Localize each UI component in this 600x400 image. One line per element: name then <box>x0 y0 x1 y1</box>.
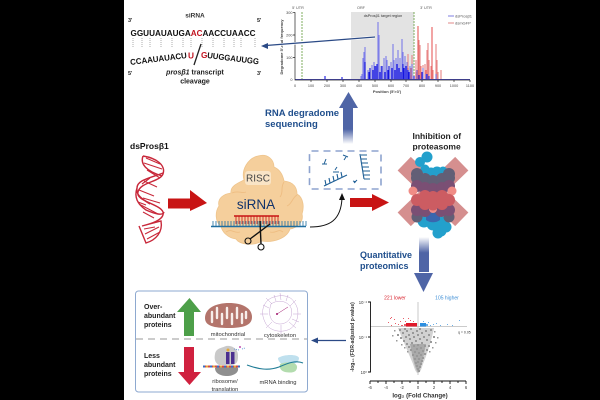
cleaved transcript left: CCAAUAUACU <box>130 50 187 67</box>
icon: mitochondrion <box>205 303 252 328</box>
label: RNA degradome sequencing <box>265 108 339 130</box>
region labels: dsProsβ1 target region <box>364 14 402 18</box>
axis labels: 100 <box>308 84 314 88</box>
siRNA sequence: GGUUAUAUGAACAACCUAACC <box>130 28 256 38</box>
counts: 221 lower <box>384 296 406 302</box>
protein blob <box>216 155 303 244</box>
region labels: ORF <box>357 6 366 10</box>
non significant density <box>398 328 434 373</box>
strand end labels <box>128 18 262 77</box>
tick labels: -6 <box>368 385 373 390</box>
icon: scissors <box>245 221 270 250</box>
base pairing dots <box>133 38 255 48</box>
strand end labels: 3' <box>128 18 133 24</box>
significant higher points <box>420 320 460 326</box>
UTR boundaries <box>302 12 414 80</box>
threshold label: q = 0.05 <box>458 330 471 334</box>
icon: cytoskeleton <box>260 293 301 334</box>
target region shading <box>351 12 414 80</box>
heading: Inhibition of proteasome: proteasome <box>412 142 461 152</box>
arrow: chart to siRNA <box>261 37 375 49</box>
label: RNA degradome sequencing: sequencing <box>265 119 318 130</box>
less abundant label: proteins <box>144 371 172 378</box>
label: Quantitative proteomics: Quantitative <box>360 250 412 260</box>
dashed box: RNA fragments <box>310 151 381 189</box>
mRNA binding label: mRNA binding <box>259 380 297 386</box>
siRNA cleavage diagram: cleavage <box>180 78 210 86</box>
significant lower points <box>388 317 417 326</box>
label: Quantitative proteomics: proteomics <box>360 261 409 271</box>
over-abundant label <box>144 304 176 329</box>
mitochondrial label: mitochondrial <box>211 332 245 338</box>
tick labels: 10⁻¹ <box>359 335 368 340</box>
white panel <box>124 0 476 400</box>
legend <box>448 14 473 26</box>
over-abundant label: Over- <box>144 304 163 311</box>
axis labels: 500 <box>372 84 378 88</box>
red arrow: dsRNA to RISC <box>168 190 207 211</box>
RISC texture <box>226 182 297 232</box>
tick labels: 0 <box>417 385 420 390</box>
region labels: 3' UTR <box>420 6 432 10</box>
axis labels: 1000 <box>450 84 458 88</box>
icon: DNA helix <box>136 156 164 243</box>
icon: mRNA binding <box>247 355 303 373</box>
transcript cleavage caption: prosβ1 transcript <box>165 70 224 76</box>
volcano plot: 105 higher <box>435 296 459 302</box>
cytoskeleton label: cytoskeleton <box>264 333 296 339</box>
tick labels: 4 <box>449 385 452 390</box>
icon: ribosome <box>203 346 245 376</box>
siRNA heading: siRNA <box>185 12 205 20</box>
tick labels: 2 <box>433 385 436 390</box>
less abundant label: Less <box>144 353 160 360</box>
label: RNA degradome sequencing: RNA degradome <box>265 108 339 119</box>
axis labels: 900 <box>435 84 441 88</box>
siRNA cleavage diagram <box>128 12 262 86</box>
red down arrow <box>178 347 201 385</box>
RNA fragments <box>322 154 370 186</box>
strand end labels: 5' <box>128 71 133 77</box>
strand end labels: 3' <box>257 71 262 77</box>
axis labels: 700 <box>403 84 409 88</box>
legend: dsmGFP <box>455 20 471 26</box>
degradome frequency chart: Position (5'>3') <box>373 89 402 94</box>
ribosome translation label: translation <box>212 387 238 393</box>
axes <box>368 302 466 384</box>
axis labels: 0 <box>294 84 296 88</box>
axis labels: 300 <box>340 84 346 88</box>
cleaved base G: G <box>201 50 207 60</box>
proteasome with inhibition cross <box>398 152 468 238</box>
proteasome subunits <box>415 152 452 238</box>
ribosome translation label <box>212 379 238 393</box>
legend: dsProsβ1 <box>455 14 473 18</box>
degradome frequency chart <box>279 6 474 94</box>
axis labels: 100 <box>286 56 292 60</box>
volcano plot: -log₁₀ (FDR-adjusted p-value) <box>350 302 356 372</box>
degradome frequency chart: Degradome 5'-end frequency <box>279 19 284 74</box>
tick labels: 6 <box>465 385 468 390</box>
RISC label <box>245 171 271 185</box>
axis labels: 0 <box>290 78 292 82</box>
tick labels: 10⁻² <box>359 300 368 305</box>
cleaved base U: U <box>188 50 194 60</box>
volcano plot <box>350 296 471 400</box>
region labels: 5' UTR <box>292 6 304 10</box>
over-abundant label: proteins <box>144 322 172 329</box>
axis labels: 400 <box>356 84 362 88</box>
blue peaks <box>361 22 436 80</box>
axis labels: 200 <box>324 84 330 88</box>
heading: Inhibition of proteasome <box>412 131 461 152</box>
axis titles: log₂ (Fold Change) <box>392 392 448 400</box>
red arrow: to proteasome <box>350 194 389 211</box>
cleaved transcript right: UUGGAUUGG <box>207 50 260 66</box>
green up arrow <box>177 298 201 336</box>
inhibition cross <box>398 157 468 226</box>
less abundant label: abundant <box>144 362 176 369</box>
arrow: quantitative proteomics <box>414 237 433 292</box>
label: dsProsβ1: dsProsβ1 <box>130 141 169 151</box>
axis labels <box>286 11 474 88</box>
target mRNA <box>211 226 306 228</box>
strand end labels: 5' <box>257 18 262 24</box>
heading: Inhibition of proteasome: Inhibition of <box>412 131 461 141</box>
red peaks <box>408 26 441 80</box>
axis labels: 1100 <box>466 84 474 88</box>
label: Quantitative proteomics <box>360 250 412 271</box>
siRNA label: siRNA <box>237 197 275 212</box>
axis labels: 600 <box>388 84 394 88</box>
arrow: RNA degradome sequencing <box>339 92 358 144</box>
axis labels: 200 <box>286 34 292 38</box>
arrow: volcano to summary <box>311 338 346 344</box>
axis labels: 300 <box>286 11 292 15</box>
axes <box>293 12 470 82</box>
ribosome translation label: ribosome/ <box>212 379 238 385</box>
threshold lines <box>370 302 467 375</box>
tick labels: 10⁰ <box>361 370 367 375</box>
less abundant label <box>144 353 176 378</box>
region labels <box>292 6 432 18</box>
curved arrow: cleavage to fragments <box>310 193 345 227</box>
tick labels: -2 <box>400 385 405 390</box>
over-abundant label: abundant <box>144 313 176 320</box>
RISC complex: RISC <box>246 174 270 184</box>
tick labels <box>359 300 468 390</box>
summary panel <box>136 291 308 393</box>
tick labels: -4 <box>384 385 389 390</box>
siRNA duplex <box>234 215 279 217</box>
RISC complex <box>211 155 306 250</box>
non significant points <box>392 328 438 372</box>
cleavage slash <box>194 44 201 65</box>
axis labels: 800 <box>419 84 425 88</box>
